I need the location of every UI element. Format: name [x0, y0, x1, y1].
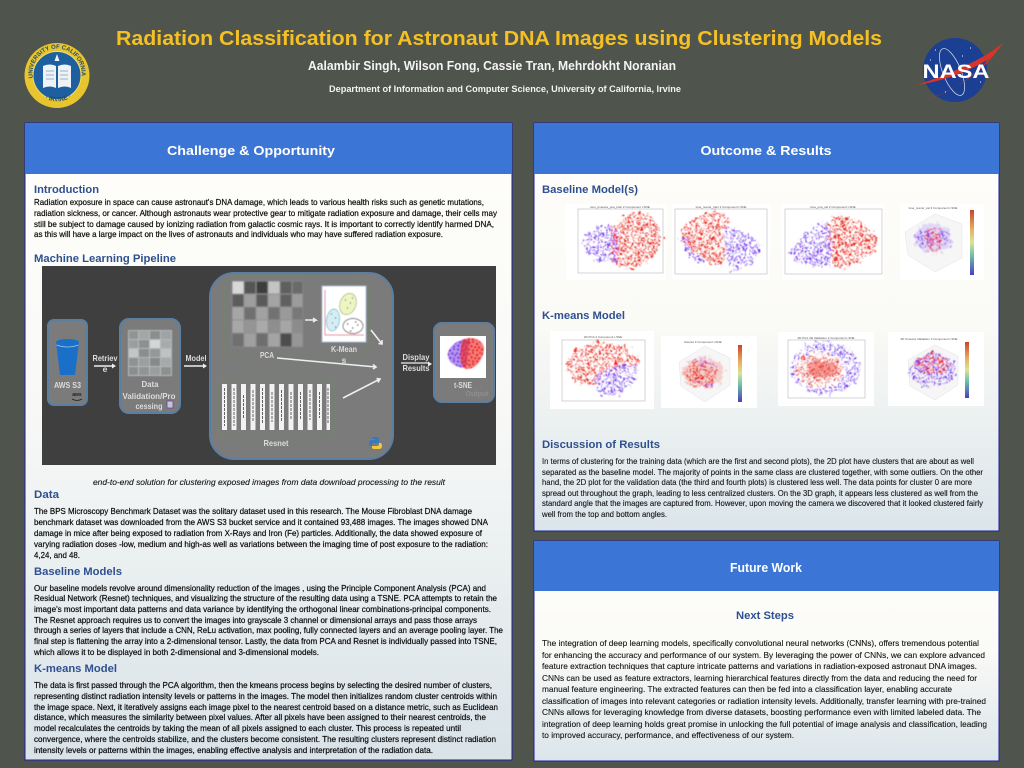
- text: baseline models body: final step is flattening the array into a 2-dimensional tensor. Lastly, the data from PCA and Resnet is individually passed into TSNE,: [34, 636, 497, 646]
- plot: k-means 3D training: Resnet 3 Component t-SNE: [684, 340, 722, 344]
- K-means illustration: [322, 286, 366, 342]
- header: [116, 28, 882, 95]
- pipeline step: data validation and processing: Validation/Pro: [122, 391, 176, 401]
- text: data body: damage in mice after being exposed to radiation from X-Rays and Iron (Fe) particles. Additionally, the data showed exposure of: [34, 528, 483, 538]
- caption: pipeline: end-to-end solution for clustering exposed images from data download processing to the result: [93, 477, 446, 487]
- label: Resnet: Resnet: [264, 438, 289, 448]
- text: discussion body: In terms of clustering for the training data (which are the first and second plots), the 2D plot have clusters that are about as well: [542, 456, 974, 466]
- text: introduction body: still be subject to damage caused by ionizing radiation from galactic cosmic rays. It is important to correctly identify harmed DNA,: [34, 219, 494, 229]
- text: data body: [34, 506, 488, 560]
- arrow: Retrieve: e: [103, 364, 108, 374]
- text: k-means body: representing distinct radiation intensity levels or patterns in the images. The model then initializes random cluster centroids within: [34, 691, 497, 701]
- plot: baseline 2D training PCA: [566, 204, 666, 280]
- heading: Baseline Models: Baseline Models: [34, 566, 122, 578]
- text: baseline models body: Our baseline models revolve around dimensionality reduction of the images , using the Principle Component Analysis (PCA) and: [34, 583, 486, 593]
- logo: UC Irvine seal: UNIVERSITY OF CALIFORNIA: [28, 44, 86, 78]
- heading: Baseline Model(s): Baseline Model(s): [542, 184, 638, 196]
- heading: Discussion of Results: Discussion of Results: [542, 439, 660, 451]
- panel: Challenge & Opportunity: [25, 123, 512, 760]
- heading: Machine Learning Pipeline: Machine Learning Pipeline: [34, 253, 176, 265]
- text: discussion body: standard angle that the images are captured from. However, upon moving the camera we discovered that it looked clustered fairly: [542, 498, 984, 508]
- pipeline step: AWS S3: [48, 320, 87, 405]
- text: data body: The BPS Microscopy Benchmark Dataset was the solitary dataset used in this research. The Mouse Fibroblast DNA damage: [34, 506, 472, 516]
- text: future work body: integration of deep learning holds great promise in unlocking the full potential of image analysis and classification, leading: [542, 719, 987, 729]
- authors: Aalambir Singh, Wilson Fong, Cassie Tran, Mehrdokht Noranian: [308, 58, 676, 73]
- arrow: Retrieve: [92, 353, 118, 374]
- pipeline step: data validation and processing: cessing: [136, 401, 162, 411]
- logo: UC Irvine seal: [24, 43, 90, 108]
- text: k-means body: [34, 680, 498, 755]
- text: future work body: [542, 638, 987, 740]
- heading: Data: Data: [34, 489, 60, 501]
- pipeline step: data validation and processing: Data: [142, 379, 159, 389]
- heading: K-means Model: K-means Model: [34, 663, 117, 675]
- pipeline step: t-SNE output: Output: [466, 391, 489, 398]
- arrow: Retrieve: Retriev: [92, 353, 118, 363]
- text: future work body: manual feature engineering. The extracted features can then be fed into a classification layer, enabling accurate: [542, 684, 952, 694]
- heading: K-means Model (results): K-means Model: [542, 310, 625, 322]
- Resnet block diagram: [218, 378, 335, 437]
- arrow: Model: [184, 353, 207, 368]
- text: future work body: The integration of deep learning models, specifically convolutional neural networks (CNNs), offers tremendous potential: [542, 638, 979, 648]
- label: K-Means: [331, 344, 357, 365]
- label: K-Means: s: [342, 355, 347, 365]
- arrow: Display Results: Results: [402, 363, 430, 373]
- pipeline step: AWS S3: AWS S3: [54, 380, 81, 390]
- label: K-Means: K-Mean: [331, 344, 357, 354]
- pipeline step: model container: [210, 273, 393, 459]
- plot: baseline 2D validation PCA: [782, 204, 884, 280]
- panel heading: Challenge & Opportunity: Challenge & Opportunity: [167, 143, 336, 158]
- text: baseline models body: [33, 583, 503, 657]
- text: baseline models body: through a series of layers that include a CNN, ReLu activation, max pooling, fully connected layers and an average pooling layer. The: [34, 625, 503, 635]
- panel: Future Work: [534, 541, 999, 761]
- arrow: PCA to K-means: [305, 318, 316, 322]
- heading: Next Steps: Next Steps: [736, 610, 794, 622]
- text: future work body: feature extraction techniques that capture intricate patterns and variations in radiation-exposed astronaut DNA images.: [542, 661, 977, 671]
- text: data body: benchmark dataset was downloaded from the AWS S3 bucket service and it contained 93,488 images. The images showed DNA: [34, 517, 488, 527]
- text: k-means body: distance, which measures the similarity between pixel values. After all pixels have been assigned to their nearest centroids, the: [34, 712, 486, 722]
- logo: UC Irvine seal: · IRVINE ·: [46, 95, 70, 102]
- logo: NASA: [917, 38, 1003, 102]
- title: Radiation Classification for Astronaut DNA Images using Clustering Models: [116, 28, 882, 50]
- text: introduction body: Radiation exposure in space can cause astronaut's DNA damage, which leads to various health risks such as genetic mutations,: [34, 197, 484, 207]
- heading: Introduction: Introduction: [34, 184, 99, 196]
- pipeline step: AWS S3: aws: [72, 392, 82, 398]
- text: baseline models body: Residual Network (Resnet) techniques, and visualizing the structure of the resulting data using a TSNE. PCA attempts to retain the: [34, 593, 497, 603]
- plot: k-means 2D validation: [778, 332, 874, 406]
- text: future work body: to improved accuracy, performance, and effectiveness of our system.: [542, 730, 794, 740]
- text: future work body: for enhancing the accuracy and performance of our system. By leveraging the power of CNNs, we can explore advanced: [542, 650, 985, 660]
- text: discussion body: [541, 456, 984, 519]
- text: k-means body: the image space. Next, it iteratively assigns each image pixel to the nearest centroid based on a distance metric, such as Euclidean: [34, 702, 498, 712]
- diagram: machine learning pipeline: [42, 266, 496, 465]
- arrow: Display Results: [401, 352, 432, 373]
- text: discussion body: well from the top and bottom angles.: [541, 509, 667, 519]
- plot: k-means 3D training: [661, 336, 757, 408]
- text: future work body: CNNs allows for leveraging knowledge from diverse datasets, boosting performance even with limited labeled data. The: [542, 707, 981, 717]
- text: future work body: CNNs can be used as feature extractors, learning hierarchical features directly from the data and reducing the need for: [542, 673, 977, 683]
- text: discussion body: spread out throughout the graph, leading to less centralized clusters. On the 3D graph, it appears less clustered as well from the: [542, 488, 978, 498]
- pipeline step: data validation and processing: [120, 319, 180, 413]
- plot: baseline 2D training Resnet: [672, 204, 770, 280]
- text: baseline models body: which allows it to be displayed in both 2-dimensional and 3-dimensional models.: [33, 647, 319, 657]
- text: discussion body: hand, the 2D plot for the validation data (the third and fourth plots) is clustered less well. The data points for cluster 0 are more: [542, 477, 972, 487]
- text: k-means body: convergence, where the centroids stabilize, and the clusters become consistent. The resulting clusters represent distinct radiation: [34, 734, 496, 744]
- plot: k-means 2D training: 2D PCA 2 Component t-SNE: [584, 335, 622, 339]
- plot: k-means 3D validation: [888, 332, 984, 406]
- panel heading: Outcome & Results: Outcome & Results: [700, 143, 832, 158]
- plot: k-means 2D validation: 2D PCA Val Validation 2 Component t-SNE: [797, 336, 855, 340]
- pipeline step: t-SNE output: [434, 323, 494, 402]
- arrow: Display Results: Display: [402, 352, 430, 362]
- text: future work body: classification of images into relevant categories or radiation intensity levels. Additionally, transfer learning with pre-trained: [542, 696, 986, 706]
- text: k-means body: intensity levels or patterns within the images, enabling effective analysis and interpretation of the radiation data.: [34, 745, 433, 755]
- logo: NASA: NASA: [922, 62, 990, 83]
- arrows: models to display: [277, 330, 382, 398]
- text: baseline models body: The Resnet approach requires us to convert the images into grayscale 3 channel or dimensional arrays and pass those arrays: [34, 615, 477, 625]
- plot: k-means 3D validation: 3D Kmeans Validation 3 Component t-SNE: [900, 337, 958, 341]
- text: k-means body: The data is first passed through the PCA algorithm, then the kmeans process begins by selecting the desired number of clusters,: [34, 680, 492, 690]
- plot: k-means 2D training: [550, 331, 654, 409]
- plot: baseline 2D training Resnet: tsne_resnet_train 2 Component t-SNE: [696, 205, 746, 209]
- plot: baseline 2D validation PCA: tsne_pca_val 2 Component t-SNE: [810, 205, 856, 209]
- text: data body: 4,24, and 48.: [34, 550, 80, 560]
- text: introduction body: [34, 197, 498, 239]
- department: Department of Information and Computer Science, University of California, Irvine: [329, 84, 681, 95]
- plot: baseline 3D: [900, 204, 984, 280]
- text: introduction body: as this will have a large impact on the lives of astronauts and individuals who may have suffered radiation exposure.: [34, 229, 443, 239]
- label: PCA: PCA: [260, 350, 274, 360]
- text: k-means body: model recalculates the centroids by taking the mean of all pixels assigned to each cluster. This process is repeated until: [34, 723, 461, 733]
- text: data body: varying radiation doses -low, medium and high-as well as variations between the imaging time of post exposure to the radiation:: [34, 539, 488, 549]
- arrow: Model: Model: [186, 353, 206, 363]
- panel: Outcome & Results: [534, 123, 999, 531]
- plot: baseline 2D training PCA: tsne_kmeans_pca_train 2 Component t-SNE: [590, 205, 650, 209]
- icon: python: [369, 437, 382, 449]
- text: baseline models body: image's most important data patterns and data variance by identifying the orthogonal linear combinations-principal components.: [34, 604, 491, 614]
- plot: baseline 3D: tsne_resnet_val 3 Component t-SNE: [909, 206, 957, 210]
- panel heading: Future Work: Future Work: [730, 560, 803, 575]
- pipeline step: t-SNE output: t-SNE: [454, 380, 472, 390]
- PCA eigenimage grid: [232, 281, 303, 347]
- text: introduction body: radiation sickness, or cancer. Although astronauts wear protective gear to mitigate radiation exposure and damage, their cells may: [34, 208, 498, 218]
- text: discussion body: separated as the baseline model. The majority of points in the same class are clustered together, with some outliers. On the other: [542, 467, 983, 477]
